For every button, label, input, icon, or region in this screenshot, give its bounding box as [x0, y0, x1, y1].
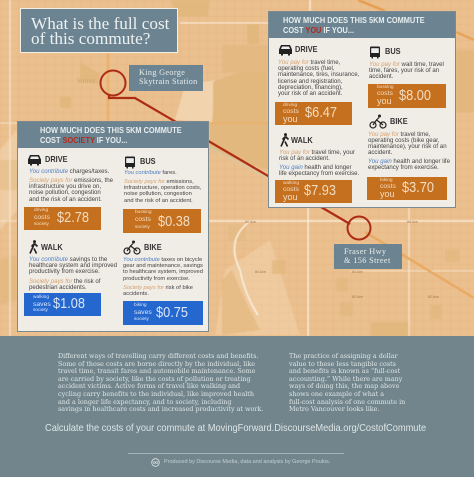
bike text: operating costs (bike gear, — [368, 137, 439, 144]
call to action: Calculate the costs of your commute at MovingForward.DiscourseMedia.org/CostofCommute — [45, 423, 426, 434]
bike text — [368, 131, 450, 171]
label: King George Skytrain Station: King George — [139, 68, 185, 77]
bus cost box: $0.38 — [158, 214, 190, 230]
bike text: You contribute taxes on bicycle — [123, 257, 202, 263]
footer text: left column: are carried by society, like the costs of pollution or treating — [58, 375, 251, 383]
drive cost box — [24, 207, 101, 230]
map background — [0, 0, 474, 336]
icon: Fraser Hwy marker circle — [348, 216, 370, 240]
footer text: right column: accounting.” While there are many — [289, 375, 402, 383]
bike cost box: costs — [380, 183, 396, 190]
drive text: license and registration, — [278, 78, 342, 85]
drive text: You pay for travel time, — [278, 59, 340, 66]
walk heading: WALK — [41, 243, 63, 252]
credits: Produced by Discourse Media, data and analysis by George Poulos. — [164, 459, 330, 465]
drive text: maintenance, tires, insurance, — [278, 71, 359, 78]
drive text: depreciation, financing), — [278, 84, 343, 91]
walk text — [29, 256, 117, 291]
walk cost box — [275, 180, 352, 203]
drive text: Society pays for emissions, the — [29, 177, 113, 184]
title box: What is the full cost — [31, 14, 169, 33]
bus text: accident. — [369, 73, 393, 80]
bike text: to healthcare system, improved — [123, 269, 203, 275]
walk savings box — [24, 293, 101, 316]
icon: bus — [125, 156, 135, 168]
bike heading: BIKE — [390, 117, 408, 126]
walk text: productivity from exercise. — [29, 268, 100, 275]
walk cost box: you — [283, 192, 298, 202]
walk cost box: walking — [283, 181, 299, 186]
bus text: noise pollution, congestion — [124, 191, 192, 197]
bus text — [124, 170, 201, 204]
label: King George Skytrain Station: Skytrain Station — [139, 77, 198, 86]
map place labels: 84 Ave — [255, 270, 266, 274]
bike savings box: biking — [134, 303, 147, 308]
footer text: right column: shows one example of what a — [289, 390, 384, 398]
drive text: noise pollution, congestion — [29, 189, 101, 196]
bus cost box: bussing — [135, 210, 152, 215]
drive cost box — [275, 102, 352, 125]
drive heading: DRIVE — [45, 155, 68, 164]
footer text: left column: Different ways of travelling carry different costs and benefits. — [58, 352, 258, 360]
map place labels: 82 Ave — [428, 295, 439, 299]
bike text: gear and maintenance, savings — [123, 263, 203, 269]
walk savings box: walking — [33, 295, 49, 300]
drive cost box: $2.78 — [57, 210, 89, 226]
drive cost box: you — [283, 114, 298, 124]
title box: of this commute? — [31, 29, 150, 48]
bus cost box — [123, 209, 201, 233]
bike cost box: you — [380, 189, 395, 199]
walk text: healthcare system and improved — [29, 262, 117, 269]
bus cost box: $8.00 — [399, 88, 431, 104]
walk text: pedestrian accidents. — [29, 284, 87, 291]
map place labels — [77, 77, 439, 299]
footer text: right column: Metro Vancouver looks like. — [289, 405, 380, 413]
bike text: maintenance), your risk of an — [368, 143, 447, 150]
bike text: You gain health and longer life — [368, 158, 450, 165]
bus text — [369, 61, 444, 80]
panel heading: COST SOCIETY IF YOU... — [40, 134, 127, 144]
map place labels: Surrey — [77, 77, 96, 85]
bike savings box: $0.75 — [156, 305, 188, 321]
footer text: right column: value to these less tangible costs — [289, 360, 396, 368]
panel heading — [18, 122, 208, 148]
walk savings box: saves — [33, 300, 51, 308]
map place labels: 88 Ave — [245, 220, 256, 224]
walk savings box: society — [33, 308, 48, 313]
label: King George Skytrain Station — [129, 65, 203, 91]
drive text: You contribute charges/taxes. — [29, 168, 109, 175]
bike savings box — [123, 301, 203, 325]
bus cost box — [368, 84, 446, 108]
walk text: Society pays for the risk of — [29, 278, 100, 284]
walk savings box: $1.08 — [53, 296, 85, 312]
icon: car — [279, 45, 292, 56]
bike savings box: society — [134, 317, 149, 322]
panel heading: COST YOU IF YOU... — [283, 24, 354, 34]
icon: car — [28, 155, 41, 166]
drive text — [29, 168, 113, 203]
label: Fraser Hwy & 156 Street — [334, 244, 402, 269]
drive cost box: $6.47 — [305, 105, 337, 121]
drive text: infrastructure you drive on, — [29, 183, 101, 190]
drive text: your risk of an accident. — [278, 90, 342, 97]
icon: King George marker circle — [100, 70, 126, 96]
footer text: left column — [58, 352, 263, 413]
walk text — [279, 149, 359, 177]
footer panel — [0, 336, 474, 477]
panel: cost to you — [268, 11, 456, 208]
bus cost box: bussing — [377, 85, 394, 90]
panel: cost to society — [17, 121, 209, 332]
drive cost box: costs — [34, 214, 50, 221]
panel heading: HOW MUCH DOES THIS 5KM COMMUTE — [40, 124, 182, 134]
icon: creative commons — [151, 458, 160, 467]
drive text — [278, 59, 359, 97]
bus heading: BUS — [140, 157, 156, 166]
bus text: time, fares, your risk of an — [369, 67, 439, 74]
bus cost box: costs — [377, 90, 393, 97]
bike cost box: biking — [380, 178, 393, 183]
walk text: You pay for travel time, your — [279, 149, 355, 156]
walk heading: WALK — [291, 136, 313, 145]
footer text: right column: and benefits is known as “full-cost — [289, 367, 400, 375]
bus text: You pay for wait time, travel — [369, 61, 444, 68]
bus text: You contribute fares. — [124, 170, 177, 176]
bike text: accident. — [368, 149, 392, 156]
footer text: left column: Some of those costs are borne directly by the individual, like — [58, 360, 255, 368]
bus cost box: costs — [135, 216, 151, 223]
title box — [20, 8, 178, 53]
drive text: and the risk of an accident. — [29, 196, 102, 203]
label: Fraser Hwy & 156 Street: Fraser Hwy — [344, 247, 386, 256]
drive cost box: society — [34, 222, 49, 227]
drive cost box: driving — [34, 208, 48, 213]
walk text: You contribute savings to the — [29, 256, 107, 263]
icon: walker — [280, 133, 289, 147]
bus cost box: you — [377, 96, 392, 106]
walk cost box: costs — [283, 186, 299, 193]
map place labels: 82 Ave — [352, 295, 363, 299]
panel heading: HOW MUCH DOES THIS 5KM COMMUTE — [283, 14, 425, 24]
icon: bike — [369, 114, 387, 129]
drive heading: DRIVE — [295, 45, 318, 54]
walk text: You gain health and longer — [279, 164, 352, 171]
footer text: right column — [289, 352, 406, 413]
bus cost box: society — [135, 225, 150, 230]
bike text: accidents. — [123, 291, 149, 297]
bus text: infrastructure, operation costs, — [124, 185, 201, 191]
footer text: right column: full-cost analysis of one commute in — [289, 398, 405, 406]
label: Fraser Hwy & 156 Street: & 156 Street — [344, 256, 391, 265]
map place labels: 88 Ave — [407, 220, 418, 224]
panel heading — [269, 12, 455, 38]
drive text: operating costs (fuel, — [278, 65, 335, 72]
drive cost box: driving — [283, 103, 297, 108]
footer text: right column: The practice of assigning a dollar — [289, 352, 398, 360]
drive cost box: costs — [283, 108, 299, 115]
footer text: left column: cycling carry benefits to the individual, like improved health — [58, 390, 254, 398]
bike savings box: saves — [134, 309, 152, 316]
icon: bike — [123, 240, 141, 255]
bike text — [123, 257, 203, 297]
footer text: left column: and a longer life expectancy, and to society, including — [58, 398, 232, 406]
footer text: left column: travel time, transit fares and automobile maintenance. Some — [58, 367, 255, 375]
footer text: left column: accident victims. Active forms of travel like walking and — [58, 382, 240, 390]
icon: bus — [370, 46, 380, 58]
map place labels: 84 Ave — [352, 270, 363, 274]
bike text: productivity from exercise. — [123, 276, 190, 282]
bike text: You pay for travel time, — [368, 131, 430, 138]
bike cost box — [367, 177, 447, 200]
bike heading: BIKE — [144, 243, 162, 252]
footer text: left column: savings in healthcare costs and increased productivity at work. — [58, 405, 263, 413]
bike text: Society pays for risk of bike — [123, 284, 193, 290]
walk cost box: $7.93 — [304, 183, 336, 199]
walk text: life expectancy from exercise. — [279, 170, 359, 177]
route line — [100, 70, 372, 240]
bike text: expectancy from exercise. — [368, 164, 439, 171]
footer text: right column: ways of doing this, the map above — [289, 382, 399, 390]
bike cost box: $3.70 — [402, 180, 434, 196]
walk text: risk of an accident. — [279, 155, 330, 162]
bus heading: BUS — [385, 47, 401, 56]
bus text: Society pays for emissions, — [124, 179, 194, 185]
icon: walker — [29, 240, 38, 254]
bus text: and the risk of an accident. — [124, 198, 193, 204]
